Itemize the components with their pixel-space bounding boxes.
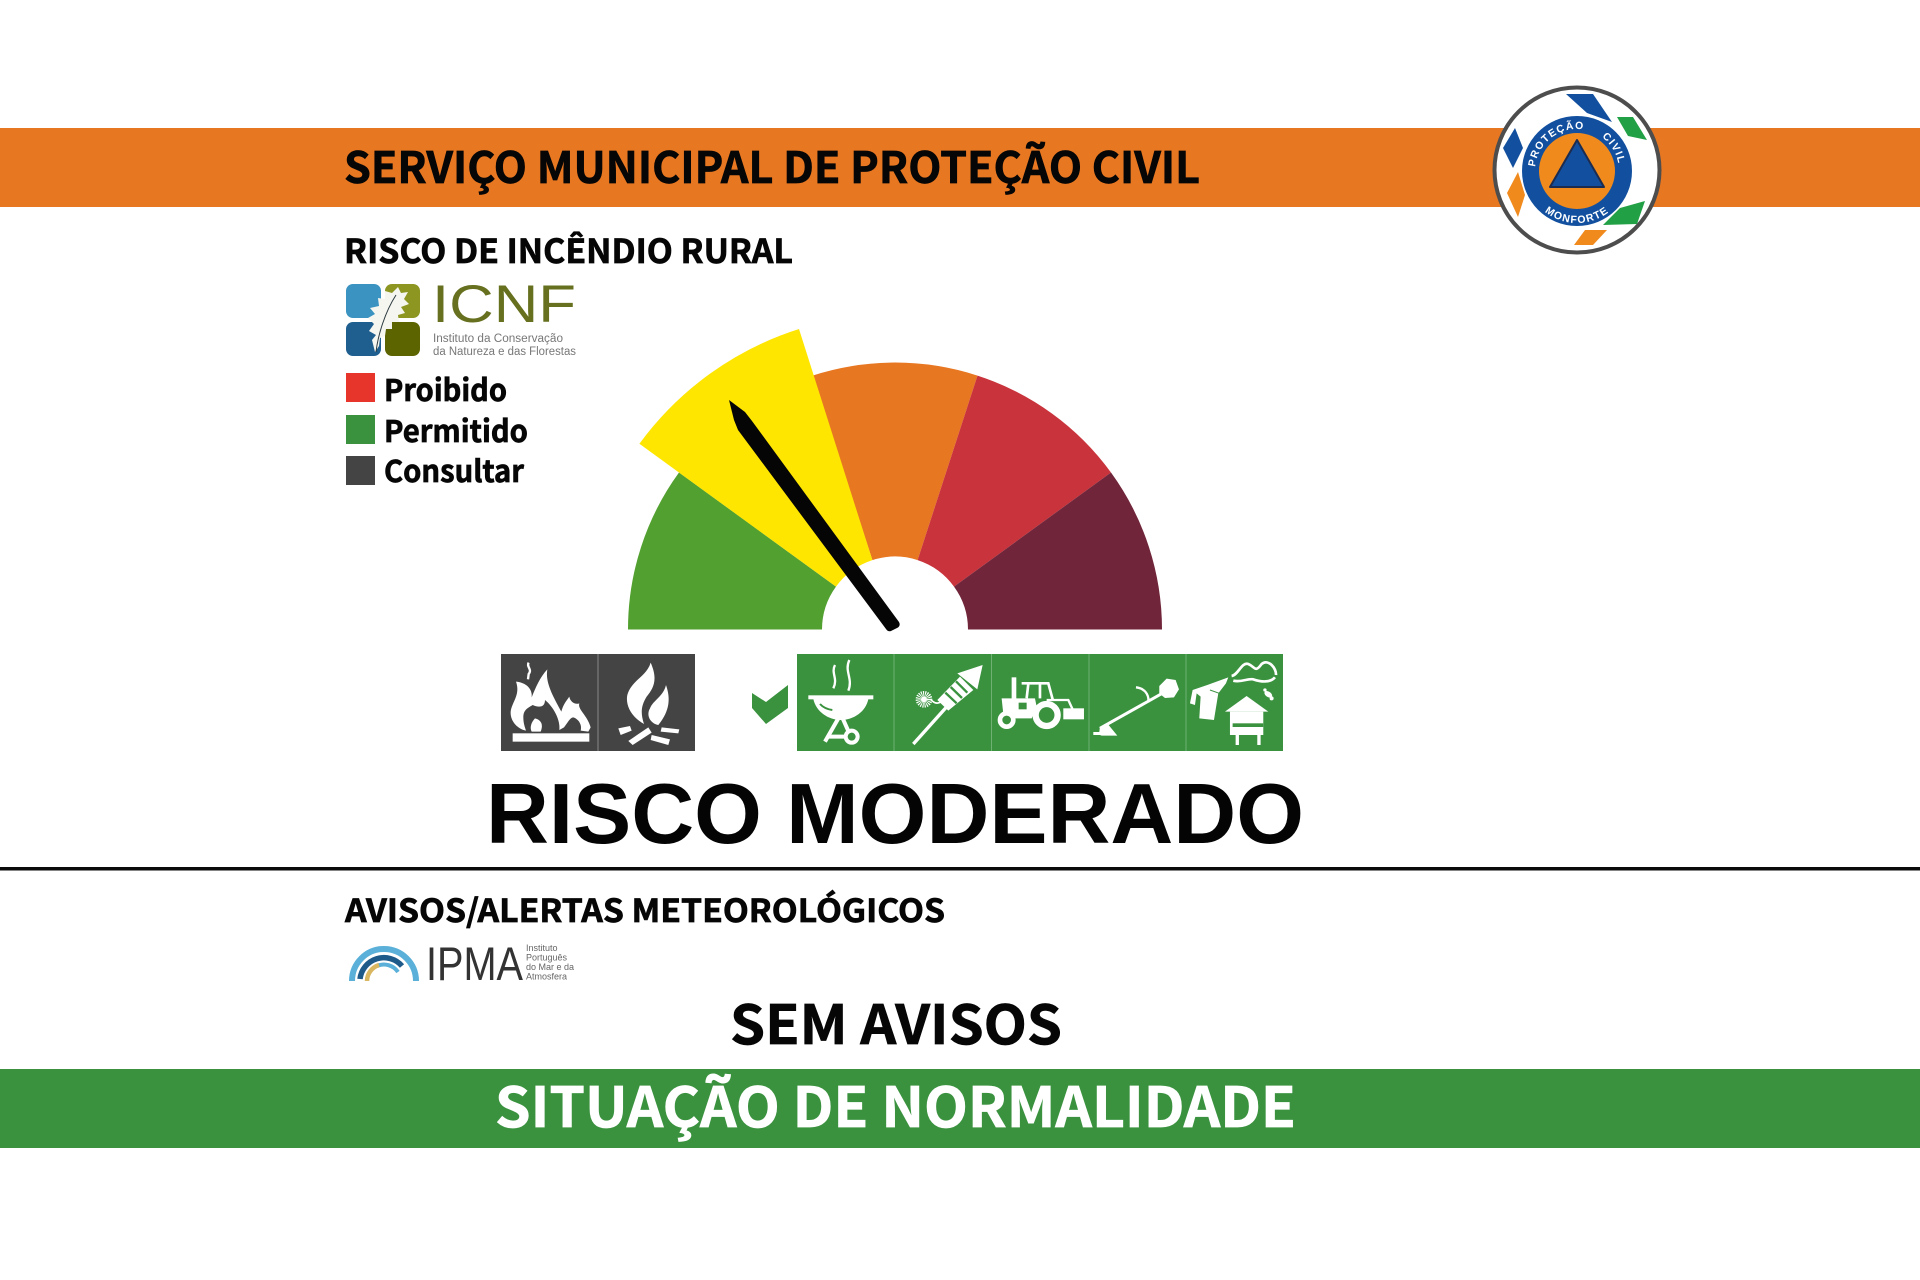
logo: IPMA: Português bbox=[526, 952, 568, 962]
logo: IPMA bbox=[352, 937, 577, 990]
gauge needle bbox=[729, 400, 900, 631]
logo: IPMA: IPMA bbox=[426, 937, 524, 990]
status: sem avisos: SEM AVISOS bbox=[730, 981, 1062, 1060]
logo: IPMA: do Mar e da bbox=[526, 962, 574, 972]
icon: barbecue bbox=[808, 660, 873, 743]
heading: avisos alertas: AVISOS/ALERTAS METEOROLÓGICOS bbox=[344, 886, 945, 932]
risk level text: RISCO MODERADO bbox=[486, 767, 1304, 862]
logo: ICNF: da Natureza e das Florestas bbox=[433, 346, 576, 358]
icon: check mark bbox=[752, 685, 788, 724]
logo: ICNF: ICNF bbox=[432, 275, 576, 334]
icon: tractor bbox=[1000, 677, 1084, 727]
logo: IPMA: Instituto bbox=[526, 943, 558, 953]
icons: prohibited/consult activities bbox=[501, 654, 695, 751]
logo: Proteção Civil Monforte: PROTEÇÃO bbox=[1528, 120, 1583, 166]
logo: Proteção Civil Monforte: MONFORTE bbox=[1545, 206, 1608, 223]
logo: Proteção Civil Monforte: CIVIL bbox=[1604, 133, 1624, 163]
icon: fire on ground bbox=[511, 663, 591, 742]
heading: risco de incendio rural: RISCO DE INCÊNDIO RURAL bbox=[344, 225, 793, 273]
legend: permitido: Permitido bbox=[384, 407, 528, 451]
icon: brush cutter bbox=[1093, 679, 1179, 736]
legend: proibido: Proibido bbox=[384, 366, 507, 410]
legend bbox=[346, 366, 528, 491]
gauge chart bbox=[628, 329, 1162, 631]
icon: beekeeping smoker and hive bbox=[1190, 662, 1276, 745]
header band bbox=[0, 128, 1920, 207]
footer band bbox=[0, 1069, 1920, 1148]
header title: SERVIÇO MUNICIPAL DE PROTEÇÃO CIVIL bbox=[344, 134, 1200, 196]
logo: IPMA: Atmosfera bbox=[526, 972, 567, 982]
legend: consultar: Consultar bbox=[384, 447, 525, 491]
gauge segment: maroon bbox=[954, 472, 1162, 630]
icon: campfire bbox=[618, 663, 679, 745]
divider line bbox=[0, 867, 1920, 870]
icons: permitted activities bbox=[797, 654, 1283, 751]
gauge segment: orange bbox=[812, 363, 978, 560]
logo: Proteção Civil Monforte bbox=[1492, 86, 1662, 254]
icon: firework rocket bbox=[913, 665, 983, 744]
logo: ICNF bbox=[346, 275, 576, 358]
logo: ICNF: Instituto da Conservação bbox=[433, 333, 563, 345]
footer text: SITUAÇÃO DE NORMALIDADE bbox=[495, 1063, 1296, 1143]
gauge segment: red bbox=[918, 376, 1111, 587]
gauge segment: yellow highlighted bbox=[639, 329, 872, 587]
gauge segment: green bbox=[628, 472, 836, 630]
